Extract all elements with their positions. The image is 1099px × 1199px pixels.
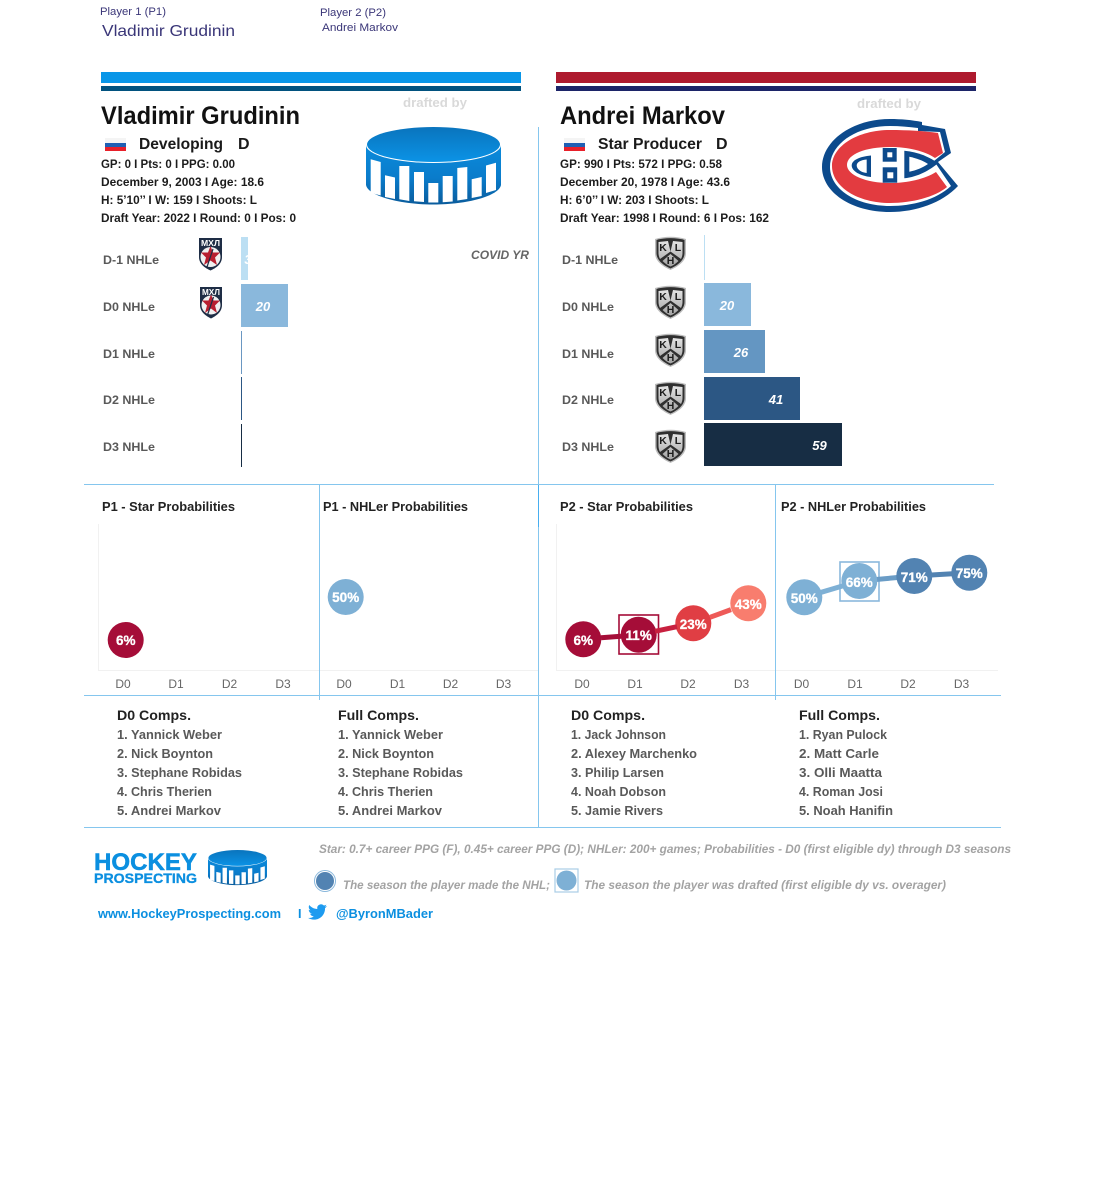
bar: D0 value 20: 20 (719, 298, 735, 313)
list: P1 D0 comps: 3. Stephane Robidas (117, 766, 242, 780)
icon: twitter bird (308, 904, 327, 920)
axis labels: D2 (443, 677, 458, 691)
list: P1 full comps (338, 707, 463, 818)
definitions note: Star: 0.7+ career PPG (F), 0.45+ career PPG (D); NHLer: 200+ games; Probabilities - D0 (first eligible dy) through D3 seasons (319, 842, 1011, 856)
legend text: draft season: The season the player was drafted (first eligible dy vs. overager) (584, 878, 946, 892)
legend (314, 869, 946, 892)
player 1 stats lines: H: 5’10’’ I W: 159 I Shoots: L (101, 193, 257, 207)
list: P2 full comps: 5. Noah Hanifin (799, 804, 893, 818)
list: P2 full comps: 1. Ryan Pulock (799, 728, 887, 742)
data point D0 50% (786, 579, 822, 615)
data point D2 71% (896, 558, 932, 594)
footer links: @ByronMBader (336, 907, 433, 921)
bar: D-1 value 3: 3 (244, 252, 252, 267)
list: P2 D0 comps: 1. Jack Johnson (571, 728, 666, 742)
draft season marker (840, 562, 879, 601)
list: P1 full comps: Full Comps. (338, 707, 419, 723)
heading: P1 - Star Probabilities (102, 500, 235, 514)
data point D0 50% (328, 579, 364, 615)
row labels: D1 NHLe (562, 347, 614, 361)
chart: P1 star probabilities (98, 500, 319, 691)
trend line (804, 573, 969, 597)
list: P1 D0 comps: 4. Chris Therien (117, 785, 212, 799)
covid year note: COVID YR (471, 248, 529, 262)
axis labels (794, 677, 969, 691)
footer brand logo (94, 849, 267, 886)
data point D3 75% (951, 555, 987, 591)
trend line (601, 610, 731, 638)
list: P1 full comps: 1. Yannick Weber (338, 728, 443, 742)
list: P2 D0 comps: D0 Comps. (571, 707, 645, 723)
axis labels: D0 (794, 677, 809, 691)
legend icon: NHL season circle (314, 870, 336, 892)
axis labels: D0 (115, 677, 131, 691)
footer links (97, 904, 433, 921)
row labels: D3 NHLe (103, 440, 155, 454)
icon: russian flag (105, 138, 126, 151)
data point D0 6%: 6% (574, 633, 593, 648)
bar: D-1 value 3 (241, 237, 248, 280)
bar: D2 value 41 (704, 377, 800, 420)
heading: player 1 name: Vladimir Grudinin (101, 102, 300, 130)
panel: player 2 colour bars (556, 72, 976, 91)
data point D2 23% (675, 605, 711, 641)
list: P2 full comps: 3. Olli Maatta (799, 766, 883, 780)
icons: KHL league shields: L (675, 242, 682, 254)
list: P1 D0 comps (117, 707, 242, 818)
data point D2 71%: 71% (901, 570, 928, 585)
row labels (103, 253, 159, 454)
list: P1 D0 comps: 1. Yannick Weber (117, 728, 222, 742)
axis labels: D1 (627, 677, 643, 691)
player 1 stats lines: GP: 0 I Pts: 0 I PPG: 0.00 (101, 157, 235, 171)
icon: montreal canadiens logo (822, 119, 958, 212)
icons: KHL league shields: K (659, 435, 667, 447)
bar: D1 value 26: 26 (733, 345, 749, 360)
row labels: D-1 NHLe (562, 253, 618, 267)
list: P2 D0 comps: 4. Noah Dobson (571, 785, 666, 799)
data point D0 50%: 50% (791, 591, 818, 606)
player 1 selector: Player 1 (P1) (100, 6, 166, 18)
heading: P1 - NHLer Probabilities (323, 500, 468, 514)
icon: small hockey puck (208, 850, 267, 885)
icons: KHL league shields: K (659, 291, 667, 303)
draft season marker (619, 615, 658, 654)
bar: D3 empty (241, 424, 242, 467)
axis labels (336, 677, 511, 691)
bar: D1 value 26 (704, 330, 765, 373)
list: P2 D0 comps (571, 707, 697, 818)
axis labels: D0 (336, 677, 352, 691)
drafted by label: drafted by (403, 96, 467, 110)
bar chart: player 2 NHLe by season (562, 235, 842, 466)
axis labels: D3 (954, 677, 969, 691)
player 1 status and position: D (238, 136, 250, 153)
icon: MHL league shield, D-1 (199, 238, 222, 270)
icons: KHL league shields: L (675, 339, 682, 351)
player 1 selector (100, 6, 235, 40)
axis labels: D0 (574, 677, 590, 691)
heading: P2 - Star Probabilities (560, 500, 693, 514)
axis labels: D1 (168, 677, 184, 691)
panel: player 1 profile (101, 96, 501, 225)
icons: KHL league shields: H (667, 352, 674, 364)
list: P1 full comps: 3. Stephane Robidas (338, 766, 463, 780)
bar: D0 value 20 (241, 284, 288, 327)
player 2 stats lines (560, 157, 769, 225)
player 2 status and position: D (716, 136, 728, 153)
player 1 status and position: Developing (139, 136, 223, 153)
legend icon: draft season square (555, 869, 578, 892)
bar: D3 value 59: 59 (812, 438, 827, 453)
list: P1 full comps: 2. Nick Boynton (338, 747, 434, 761)
data point D3 43% (730, 585, 766, 621)
axis labels: D1 (847, 677, 863, 691)
icon: MHL league shield, D-1: МХЛ (201, 238, 220, 248)
player 2 selector: Andrei Markov (322, 22, 399, 34)
list: P1 full comps: 5. Andrei Markov (338, 804, 442, 818)
player 2 status and position: Star Producer (598, 136, 702, 153)
chart: P1 NHLer probabilities (320, 500, 538, 691)
icons: KHL league shields: H (667, 255, 674, 267)
bar: D0 value 20 (704, 283, 751, 326)
icons: KHL league shields: L (675, 435, 682, 447)
bar: D3 value 59 (704, 423, 842, 466)
axis labels: D1 (390, 677, 405, 691)
icons: KHL league shields: H (667, 400, 674, 412)
row labels: D2 NHLe (562, 393, 614, 407)
player 1 stats lines (101, 157, 296, 225)
footer brand logo: PROSPECTING (94, 871, 197, 886)
legend text: NHL season: The season the player made the NHL; (343, 878, 550, 892)
data point D0 6% (565, 621, 601, 657)
player 2 stats lines: Draft Year: 1998 I Round: 6 I Pos: 162 (560, 211, 769, 225)
icons: KHL league shields (655, 237, 686, 463)
axis labels: D2 (222, 677, 237, 691)
bar: D0 value 20: 20 (255, 299, 271, 314)
axis labels: D3 (734, 677, 749, 691)
bar: D-1 empty (704, 235, 705, 280)
player 2 selector (320, 7, 399, 34)
data point D1 11%: 11% (626, 628, 652, 643)
player 1 stats lines: December 9, 2003 I Age: 18.6 (101, 175, 264, 189)
data point D2 23%: 23% (680, 617, 707, 632)
panel: player 2 profile (560, 97, 958, 225)
bar: D2 value 41: 41 (768, 392, 783, 407)
icons: KHL league shields: L (675, 387, 682, 399)
list: P2 full comps: 2. Matt Carle (799, 747, 879, 761)
icon: russian flag (564, 138, 585, 151)
icon: hockey puck logo (366, 127, 501, 204)
bar: D1 empty (241, 331, 242, 374)
axis labels (115, 677, 291, 691)
row labels (562, 253, 618, 454)
list: P2 full comps: Full Comps. (799, 707, 880, 723)
data point D0 50%: 50% (332, 590, 359, 605)
drafted by label: drafted by (857, 97, 921, 111)
row labels: D-1 NHLe (103, 253, 159, 267)
data point D1 66%: 66% (846, 575, 873, 590)
list: P1 full comps: 4. Chris Therien (338, 785, 433, 799)
list: P2 D0 comps: 3. Philip Larsen (571, 766, 664, 780)
icons: KHL league shields: K (659, 339, 667, 351)
panel: player 1 colour bars (101, 72, 521, 91)
row labels: D0 NHLe (562, 300, 614, 314)
player 2 stats lines: GP: 990 I Pts: 572 I PPG: 0.58 (560, 157, 722, 171)
player 2 stats lines: H: 6’0’’ I W: 203 I Shoots: L (560, 193, 709, 207)
list: P2 full comps (799, 707, 893, 818)
row labels: D2 NHLe (103, 393, 155, 407)
icon: MHL league shield, D0 (200, 287, 222, 318)
row labels: D3 NHLe (562, 440, 614, 454)
icons: KHL league shields: H (667, 304, 674, 316)
row labels: D0 NHLe (103, 300, 155, 314)
axis labels: D2 (680, 677, 696, 691)
data point D3 75%: 75% (956, 566, 983, 581)
icons: KHL league shields: K (659, 387, 667, 399)
heading: player 2 name: Andrei Markov (560, 102, 725, 130)
icons: KHL league shields: K (659, 242, 667, 254)
list: P1 D0 comps: 5. Andrei Markov (117, 804, 221, 818)
vertical divider between players (538, 127, 540, 827)
player 1 selector: Vladimir Grudinin (102, 23, 235, 40)
axis labels: D2 (900, 677, 916, 691)
axis labels (574, 677, 749, 691)
row labels: D1 NHLe (103, 347, 155, 361)
player 2 stats lines: December 20, 1978 I Age: 43.6 (560, 175, 730, 189)
icons: KHL league shields: H (667, 448, 674, 460)
chart: P2 NHLer probabilities (776, 500, 998, 691)
footer links: www.HockeyProspecting.com (97, 907, 281, 921)
axis labels: D3 (275, 677, 291, 691)
data point D3 43%: 43% (735, 597, 762, 612)
bar chart: player 1 NHLe by season (103, 237, 529, 467)
data point D1 11% (621, 617, 657, 653)
chart: P2 star probabilities (556, 500, 775, 691)
icon: MHL league shield, D0: МХЛ (202, 287, 220, 297)
list: P2 D0 comps: 5. Jamie Rivers (571, 804, 663, 818)
player 2 selector: Player 2 (P2) (320, 7, 386, 19)
list: P2 full comps: 4. Roman Josi (799, 785, 883, 799)
bar: D2 empty (241, 377, 242, 420)
footer brand logo: HOCKEY (94, 849, 197, 876)
axis labels: D3 (496, 677, 511, 691)
data point D0 6%: 6% (116, 633, 135, 648)
heading: P2 - NHLer Probabilities (781, 500, 926, 514)
list: P1 D0 comps: 2. Nick Boynton (117, 747, 213, 761)
data point D0 6% (108, 622, 144, 658)
footer links: I (298, 907, 301, 921)
list: P2 D0 comps: 2. Alexey Marchenko (571, 747, 697, 761)
data point D1 66% (841, 563, 877, 599)
list: P1 D0 comps: D0 Comps. (117, 707, 191, 723)
panel dividers (84, 484, 1001, 828)
icons: KHL league shields: L (675, 291, 682, 303)
player 1 stats lines: Draft Year: 2022 I Round: 0 I Pos: 0 (101, 211, 296, 225)
